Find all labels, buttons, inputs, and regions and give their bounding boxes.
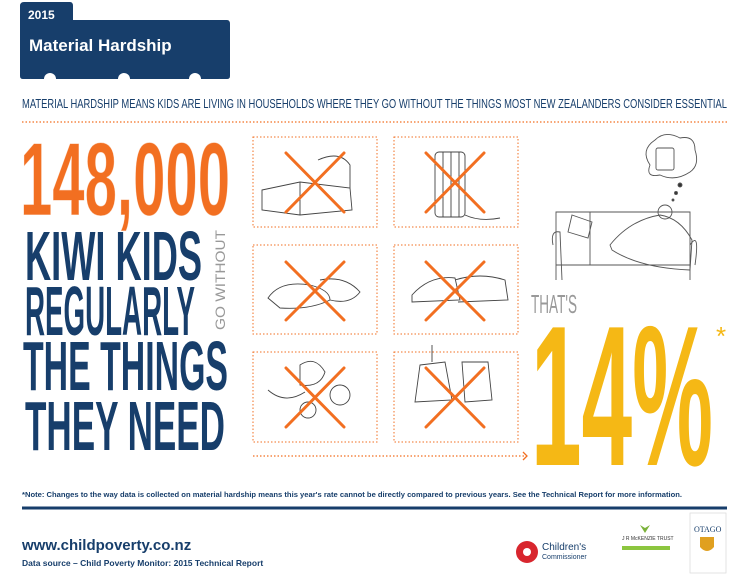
- logo: otago: [690, 513, 726, 573]
- orange X marks: [286, 153, 484, 427]
- text: REGULARLY: [25, 272, 195, 350]
- header tab: Material Hardship: [29, 36, 172, 55]
- panels grid: [253, 137, 518, 442]
- headline: kiwi kids: KIWI KIDS: [25, 217, 202, 295]
- logo: jr mckenzie trust: [622, 525, 674, 550]
- headline: kiwi kids: THEY NEED: [25, 387, 225, 465]
- logo: jr mckenzie trust: J R McKENZIE TRUST: [622, 536, 674, 542]
- logo: otago: OTAGO: [694, 525, 722, 534]
- illustration: person on sofa thinking of heater: [552, 134, 697, 280]
- big number 148,000: [20, 122, 230, 238]
- logo: childrens commissioner: [516, 541, 587, 563]
- logo: childrens commissioner: Children's: [542, 542, 586, 553]
- go without vertical: GO WITHOUT: [212, 230, 228, 330]
- headline: kiwi kids: [23, 217, 228, 465]
- that's: THAT'S: [531, 289, 577, 319]
- website: www.childpoverty.co.nz: [21, 537, 191, 554]
- logo: childrens commissioner: Commissioner: [542, 554, 587, 561]
- big number 148,000: 148,000: [20, 122, 230, 238]
- data source: Data source – Child Poverty Monitor: 2015 Technical Report: [22, 558, 263, 568]
- dotted arrow: [253, 452, 527, 460]
- big number 148,000: 148,000: [20, 122, 230, 238]
- sketches: [262, 152, 508, 418]
- header tab: [20, 2, 230, 85]
- text: THE THINGS: [23, 327, 228, 405]
- asterisk: *: [716, 321, 726, 351]
- header tab: 2015: [28, 8, 55, 22]
- footnote: *Note: Changes to the way data is collected on material hardship means this year's rate cannot be directly compared to previous years. See the Technical Report for more information.: [22, 490, 682, 499]
